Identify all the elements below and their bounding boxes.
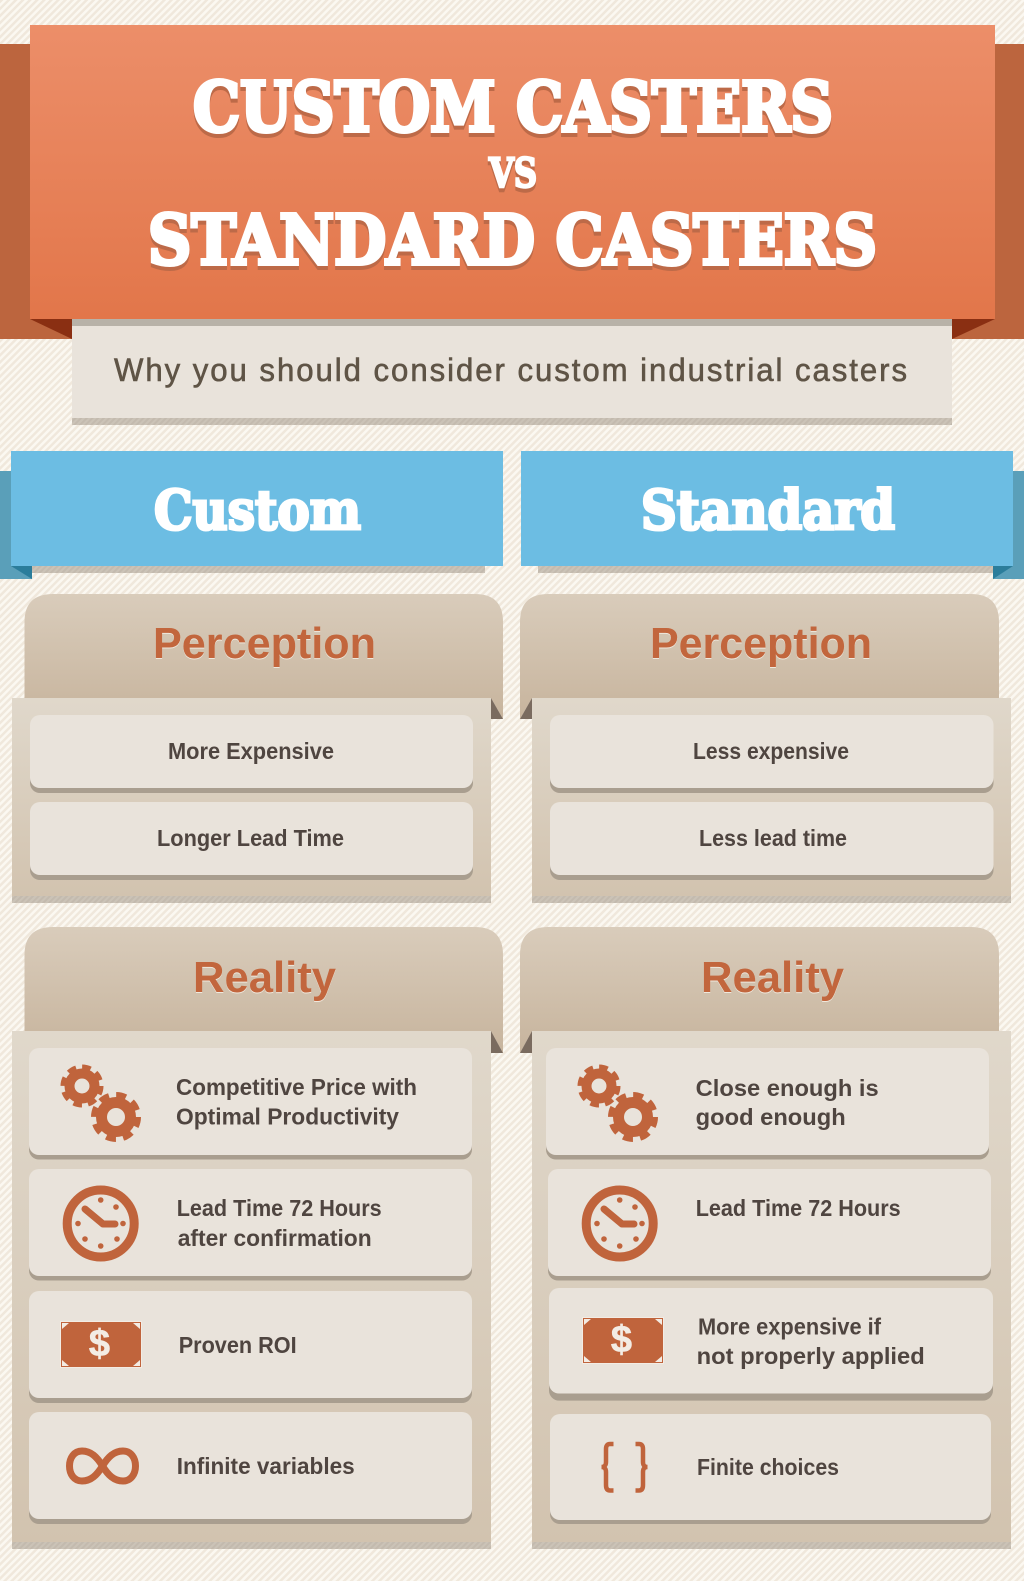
title text: STANDARD CASTERS bbox=[148, 201, 877, 281]
heading: reality: Reality bbox=[193, 953, 337, 1002]
row: competitive price: Competitive Price with bbox=[176, 1074, 417, 1100]
row: competitive price bbox=[29, 1048, 472, 1160]
row: lead time bbox=[29, 1169, 472, 1280]
row: less lead time bbox=[550, 802, 994, 880]
panel: custom perception bbox=[12, 594, 503, 903]
icon: gears bbox=[64, 1068, 138, 1139]
row: competitive price: Optimal Productivity bbox=[176, 1104, 399, 1130]
column header: Standard: Standard bbox=[641, 478, 895, 542]
row: infinite variables: Infinite variables bbox=[177, 1453, 355, 1479]
icon: infinity bbox=[70, 1451, 136, 1481]
row: longer lead time: Longer Lead Time bbox=[157, 825, 344, 851]
row: finite choices bbox=[550, 1414, 991, 1524]
column header: Custom bbox=[0, 451, 503, 579]
row: close enough bbox=[546, 1048, 989, 1160]
heading: perception: Perception bbox=[650, 619, 872, 668]
panel: custom reality bbox=[12, 927, 503, 1549]
row: close enough: Close enough is bbox=[696, 1075, 879, 1101]
row: more expensive if misapplied: More expensive if bbox=[698, 1313, 881, 1339]
panel: standard reality bbox=[520, 927, 1011, 1549]
title text: VS bbox=[488, 150, 537, 197]
title text bbox=[148, 68, 877, 281]
row: finite choices: Finite choices bbox=[697, 1454, 839, 1480]
subtitle ribbon bbox=[72, 319, 952, 425]
column header: Standard bbox=[521, 451, 1024, 579]
row: less expensive: Less expensive bbox=[693, 738, 849, 764]
icon: money: $ bbox=[611, 1319, 632, 1361]
heading: perception: Perception bbox=[153, 619, 376, 668]
row: lead time: after confirmation bbox=[178, 1225, 372, 1251]
row: more expensive bbox=[30, 715, 473, 793]
icon: clock bbox=[586, 1190, 653, 1257]
icon: money bbox=[60, 1322, 142, 1368]
row: lead time: Lead Time 72 Hours bbox=[696, 1195, 901, 1221]
title banner bbox=[0, 25, 1024, 339]
row: lead time bbox=[548, 1169, 991, 1280]
heading: reality: Reality bbox=[701, 953, 845, 1002]
panel: standard perception bbox=[520, 594, 1011, 903]
icon: clock bbox=[67, 1190, 134, 1257]
row: infinite variables bbox=[29, 1412, 472, 1524]
row: proven roi bbox=[29, 1291, 472, 1403]
row: proven roi: Proven ROI bbox=[179, 1332, 297, 1358]
icon: gears bbox=[580, 1068, 655, 1139]
subtitle ribbon: Why you should consider custom industrial casters bbox=[114, 352, 909, 388]
icon: money bbox=[582, 1318, 664, 1364]
row: lead time: Lead Time 72 Hours bbox=[177, 1195, 382, 1221]
row: close enough: good enough bbox=[696, 1104, 846, 1130]
title text: CUSTOM CASTERS bbox=[193, 68, 833, 148]
icon: braces bbox=[602, 1444, 648, 1490]
row: less expensive bbox=[550, 715, 994, 793]
row: longer lead time bbox=[30, 802, 473, 880]
row: more expensive if misapplied bbox=[549, 1288, 993, 1401]
column header: Custom: Custom bbox=[154, 478, 361, 542]
icon: money: $ bbox=[89, 1323, 110, 1365]
row: less lead time: Less lead time bbox=[699, 825, 847, 851]
row: more expensive: More Expensive bbox=[168, 738, 334, 764]
row: more expensive if misapplied: not properly applied bbox=[697, 1343, 925, 1369]
